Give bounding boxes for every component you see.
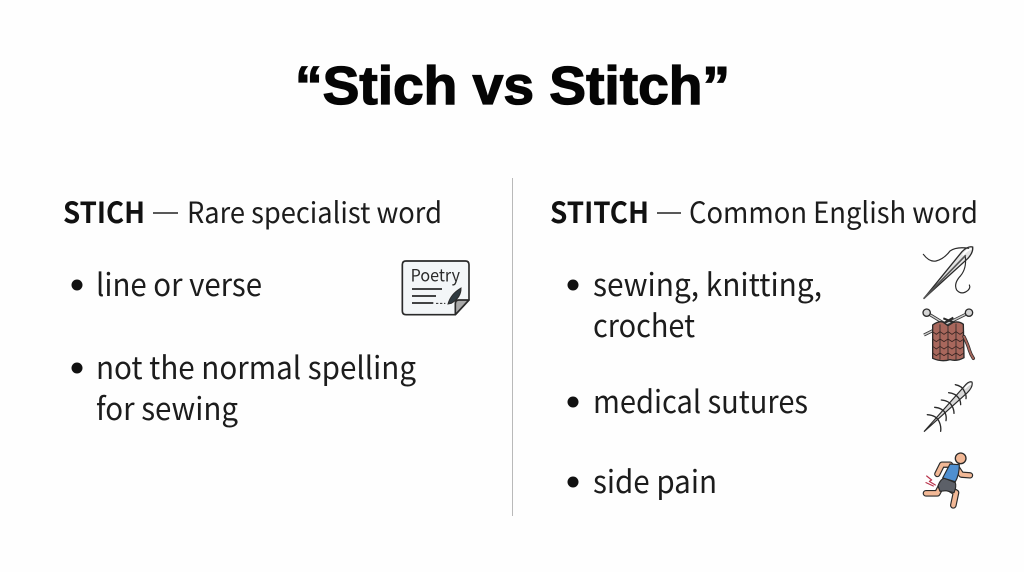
bullet: medical sutures: medical sutures <box>593 377 808 422</box>
heading: stitch <box>550 190 978 232</box>
bullet: not the normal spelling <box>72 343 416 429</box>
heading: stich <box>63 190 442 232</box>
bullet: sewing, knitting, crochet: sewing, knitting, <box>593 260 822 305</box>
icon: poetry page: Poetry <box>411 261 460 286</box>
icon: knitting <box>923 309 973 361</box>
bullet: not the normal spelling: not the normal spelling <box>96 343 416 388</box>
heading: stich: STICH <box>63 190 145 232</box>
bullet: sewing, knitting, crochet <box>568 260 822 346</box>
panel: stitch <box>550 190 978 505</box>
bullet: sewing, knitting, crochet: crochet <box>593 301 695 346</box>
heading: stitch: STITCH <box>550 190 649 232</box>
title: “Stich vs Stitch” <box>295 56 730 116</box>
column divider <box>512 178 514 516</box>
icon: needle and thread <box>923 247 973 298</box>
panel: stich <box>63 190 469 429</box>
heading: stich: Rare specialist word <box>187 190 442 232</box>
icon: runner with side pain <box>926 453 970 505</box>
bullet: side pain: side pain <box>593 457 717 502</box>
icon: poetry page <box>402 261 469 315</box>
heading: stitch: Common English word <box>689 190 978 232</box>
icon: suture needle <box>924 382 972 432</box>
bullet: not the normal spelling: for sewing <box>96 384 238 429</box>
bullet: line or verse: line or verse <box>96 260 262 305</box>
